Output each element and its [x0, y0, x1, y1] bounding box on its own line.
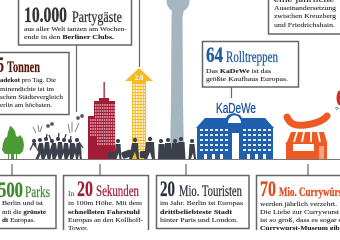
heading: In 20 Sekunden: In	[68, 189, 74, 198]
text: parks: Berlin und ist	[2, 200, 43, 207]
icon: food stand	[286, 132, 327, 159]
connector lines	[12, 0, 308, 175]
ground line	[0, 158, 340, 160]
text: tonnes: schen Städtevergleich	[0, 94, 64, 101]
text: currywurst: Die Liebe zur Currywurst	[260, 209, 339, 216]
text: escalators	[206, 68, 288, 83]
text: conflict note: zwischen Kreuzberg	[274, 13, 337, 20]
text: parks: dt Europas.	[2, 217, 35, 224]
heading: 64 Rolltreppen: 64	[206, 42, 223, 67]
text: currywurst: werden jährlich verzehrt.	[260, 201, 337, 208]
icon: trees	[2, 126, 24, 159]
heading: 5 Tonnen	[0, 52, 40, 77]
text: tonnes: adekot pro Tag. Die	[0, 77, 56, 84]
panel: conflict note	[268, 0, 340, 34]
text: tourists: im Jahr. Berlin ist Europas	[160, 200, 243, 207]
text: tonnes: erlin am höchsten.	[0, 102, 52, 109]
heading: In 20 Sekunden: Sekunden	[96, 183, 139, 200]
TV tower	[166, 0, 190, 159]
text: party guests: ende in den Berliner Clubs.	[24, 34, 114, 41]
icon: music notes and rays	[33, 114, 84, 133]
icon: KaDeWe logo: KaDeWe	[216, 101, 256, 117]
panel: escalators	[202, 42, 298, 87]
heading: 70 Mio. Currywürste: 70	[260, 176, 276, 201]
icon: travellers	[108, 137, 196, 159]
panel: tonnes	[0, 52, 69, 114]
icon: KaDeWe building	[196, 113, 274, 159]
heading: 20 Mio. Touristen: Mio. Touristen	[179, 183, 242, 200]
heading: 10.000 Partygäste: 10.000	[24, 2, 67, 27]
heading: 20 Mio. Touristen	[160, 176, 242, 201]
text: conflict note: und Friedrichshain.	[274, 22, 335, 29]
icon: red fruit	[335, 90, 340, 110]
heading: 500 Parks	[0, 177, 50, 202]
text: tonnes: minendichte ist im	[0, 86, 55, 93]
text: tourists: hinter Paris und London.	[160, 217, 238, 224]
text: parks	[2, 200, 46, 224]
text: party guests	[24, 26, 127, 41]
heading: In 20 Sekunden	[68, 176, 139, 201]
text: escalators: größte Kaufhaus Europas.	[206, 76, 288, 83]
panel: elevator	[64, 176, 148, 236]
text: tourists: drittbeliebteste Stadt	[160, 209, 233, 216]
text: elevator: Europas an den Kollhoff-	[68, 217, 143, 224]
text: currywurst: ist so groß, dass es sogar ein	[260, 217, 340, 224]
text: conflict note	[274, 0, 337, 29]
heading: 500 Parks: Parks	[25, 184, 50, 201]
text: escalators: Das KaDeWe ist das	[206, 68, 271, 75]
text: currywurst	[260, 201, 340, 232]
panel: tourists	[156, 176, 249, 228]
text: party guests: aus aller Welt tanzen am Wochen-	[24, 26, 127, 33]
text: tourists	[160, 200, 243, 224]
heading: 20 Mio. Touristen: 20	[160, 176, 175, 201]
heading: 10.000 Partygäste: Partygäste	[72, 9, 122, 26]
panel: party guests	[18, 0, 132, 45]
heading: 70 Mio. Currywürste	[260, 176, 340, 201]
panel: parks	[0, 176, 56, 228]
heading: In 20 Sekunden: 20	[77, 176, 93, 201]
text: tonnes	[0, 77, 64, 109]
heading: 64 Rolltreppen	[206, 42, 278, 67]
icon: dancing crowd	[30, 133, 83, 159]
heading: 10.000 Partygäste	[24, 2, 122, 27]
text: conflict note: Auseinandersetzung	[274, 5, 337, 12]
icon: yellow arrow tower: 2.0	[135, 74, 144, 82]
heading: 5 Tonnen: Tonnen	[7, 59, 40, 76]
icon: red tower	[88, 82, 115, 159]
heading: 64 Rolltreppen: Rolltreppen	[226, 49, 278, 66]
icon: yellow arrow tower	[125, 68, 153, 159]
text: elevator: in 100m Höhe. Mit dem	[68, 200, 143, 207]
icon: sausage	[287, 116, 327, 125]
text: parks: mit die grünste	[2, 209, 46, 216]
panel: currywurst	[256, 176, 340, 236]
text: elevator: schnellsten Fahrstuhl	[68, 209, 140, 216]
text: elevator	[68, 200, 143, 232]
